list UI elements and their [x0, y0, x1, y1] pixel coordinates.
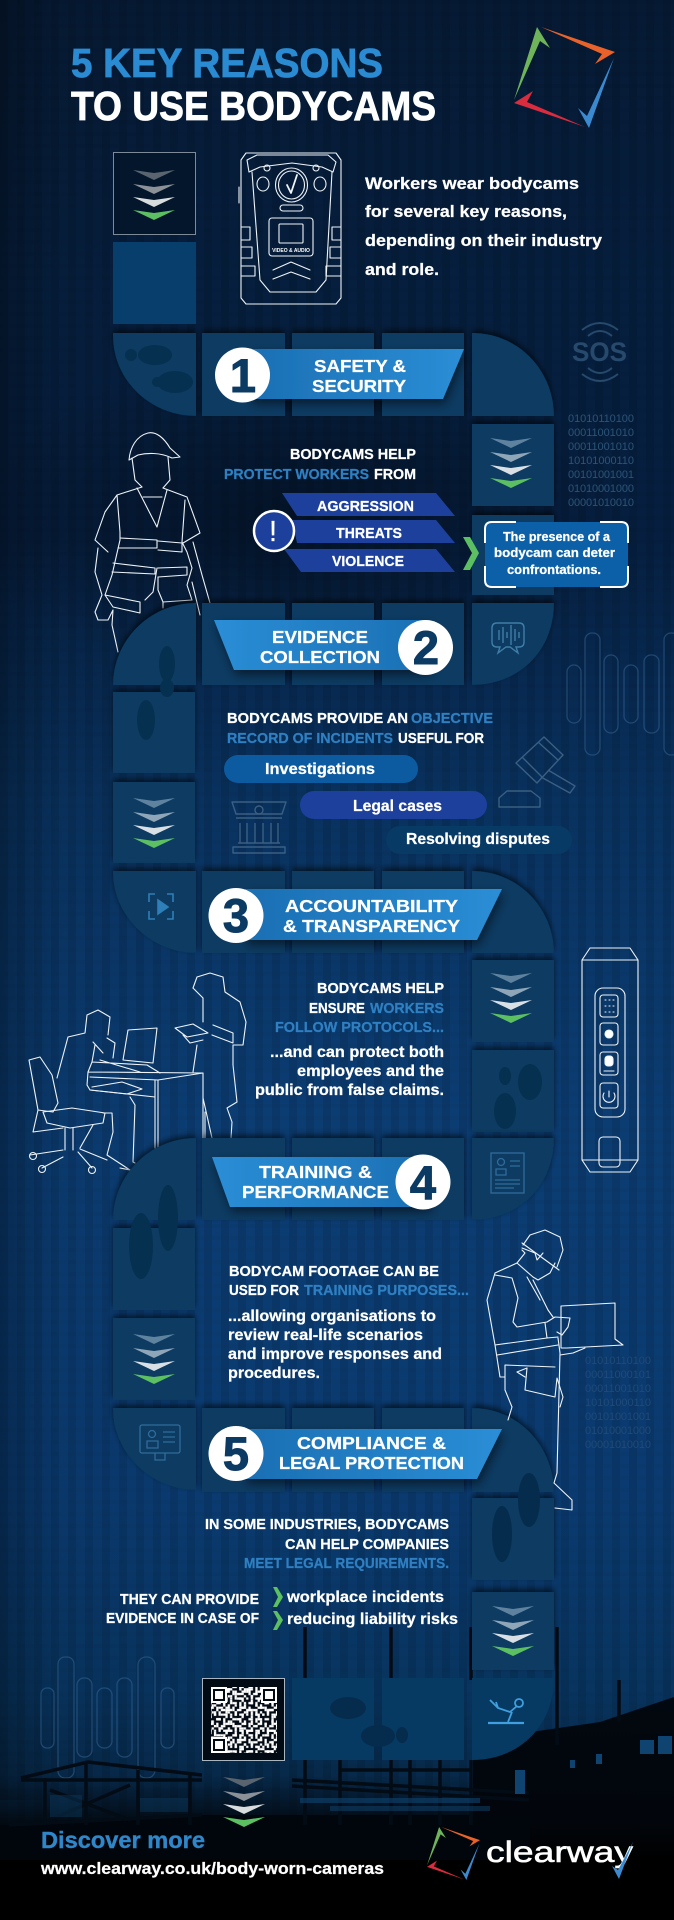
icon: play frame: [149, 894, 173, 919]
icon: bodycam: VIDEO & AUDIO: [272, 248, 310, 254]
body text: [229, 1264, 469, 1299]
binary text lower: 00101001001: [585, 1411, 651, 1423]
body text continued: [255, 1044, 444, 1099]
binary text lower: 10101000110: [585, 1397, 651, 1409]
body text: PROTECT WORKERS: [224, 467, 369, 483]
pill: resolving disputes: Resolving disputes: [406, 831, 550, 848]
body text continued: employees and the: [297, 1063, 444, 1080]
binary text lower: 00011000101: [585, 1369, 651, 1381]
tile row 2: [113, 603, 554, 863]
title: [71, 40, 436, 129]
icon: green chevron: [463, 537, 479, 570]
heading 5: COMPLIANCE &: [297, 1433, 446, 1453]
icon: SOS signal: [572, 323, 627, 381]
body text: BODYCAMS HELP: [317, 981, 444, 997]
illustration: worker in vest: [95, 433, 210, 652]
body text: ENSURE: [309, 1001, 365, 1017]
body text: OBJECTIVE: [411, 711, 493, 727]
body text continued: procedures.: [228, 1365, 320, 1382]
binary text lower: 00001010010: [585, 1439, 651, 1451]
icon: radio device: [582, 948, 638, 1172]
body text: CAN HELP COMPANIES: [285, 1537, 449, 1553]
illustration: worker with tablet: [487, 1230, 623, 1510]
steel structure silhouette: [0, 1627, 674, 1860]
banner 4: [212, 1157, 430, 1207]
callout: confrontations.: [507, 563, 601, 577]
number 1: [215, 348, 270, 402]
bottom tile row: [292, 1678, 554, 1760]
binary text lower: 01010001000: [585, 1425, 651, 1437]
number 5: 5: [223, 1427, 249, 1480]
pill: investigations: [224, 755, 418, 783]
list: aggression threats violence: VIOLENCE: [332, 554, 404, 570]
body text: EVIDENCE IN CASE OF: [106, 1611, 259, 1627]
binary text top: 01010001000: [568, 483, 634, 495]
binary text top: 00011001010: [568, 427, 634, 439]
panel: section 5 compliance and legal protection: [106, 1230, 623, 1760]
heading 1: SECURITY: [312, 376, 406, 396]
intro text: for several key reasons,: [365, 203, 567, 221]
number 2: 2: [413, 621, 439, 674]
logo mark top: [514, 27, 615, 128]
heading 2: COLLECTION: [260, 647, 380, 667]
call to action: [40, 1827, 384, 1878]
tile row 4: [113, 1138, 554, 1400]
callout: The presence of a: [503, 530, 611, 544]
arrows below QR: [223, 1777, 265, 1827]
decorative waveform right: [567, 633, 674, 755]
body text: FROM: [374, 467, 416, 483]
heading 4: TRAINING &: [259, 1162, 372, 1182]
tile: arrows outlined: [114, 152, 196, 234]
body text: USEFUL FOR: [398, 731, 484, 747]
binary text top: 10101000110: [568, 455, 634, 467]
number 4: [396, 1154, 450, 1210]
body text continued: [228, 1308, 442, 1382]
heading 3: ACCOUNTABILITY: [285, 896, 458, 916]
number 5: [208, 1426, 264, 1481]
call to action: Discover more: [41, 1827, 205, 1853]
QR code: [202, 1678, 284, 1760]
icon: footprints: [137, 646, 175, 740]
heading 4: [242, 1162, 389, 1202]
list text: workplace incidents: [286, 1589, 444, 1606]
heading 2: EVIDENCE: [272, 627, 368, 647]
tile row 1: [113, 333, 554, 595]
binary text top: [568, 413, 634, 509]
binary text top: 00101001001: [568, 469, 634, 481]
panel: section 4 training and performance: [113, 1138, 554, 1400]
icon: bodycam: [239, 153, 341, 304]
banner 5: [245, 1429, 502, 1479]
binary text top: 01010110100: [568, 413, 634, 425]
arrows tile: [490, 973, 532, 1023]
icon: document: [491, 1153, 524, 1193]
number 2: [398, 620, 453, 675]
icon: footprints: [330, 1473, 540, 1747]
body text: [227, 711, 493, 747]
intro text: and role.: [365, 261, 439, 279]
tile row 5: [113, 1408, 554, 1670]
callout: [485, 522, 628, 587]
icon: monitor profile: [140, 1425, 180, 1460]
number 4: 4: [410, 1156, 436, 1209]
panel: section 3 accountability and transparency: [29, 871, 638, 1174]
body text: IN SOME INDUSTRIES, BODYCAMS: [205, 1517, 449, 1533]
tile row 3: [113, 871, 554, 1132]
body text: BODYCAM FOOTAGE CAN BE: [229, 1264, 439, 1280]
list text: reducing liability risks: [287, 1611, 458, 1628]
list text: [286, 1589, 458, 1628]
green chevrons: [273, 1587, 283, 1630]
clearway logo: [427, 1827, 633, 1880]
binary text lower: 00011001010: [585, 1383, 651, 1395]
intro text: Workers wear bodycams: [365, 175, 579, 193]
body text: THEY CAN PROVIDE: [120, 1592, 259, 1608]
heading 2: [260, 627, 380, 667]
body text: BODYCAMS HELP: [290, 447, 416, 463]
binary text top: 00001010010: [568, 497, 634, 509]
tile: blank: [113, 242, 196, 324]
intro text: depending on their industry: [365, 232, 603, 250]
icon: SOS signal: SOS: [572, 337, 627, 367]
list: aggression threats violence: [254, 493, 455, 572]
binary text lower: 01010110100: [585, 1355, 651, 1367]
pill: legal cases: Legal cases: [353, 798, 442, 815]
body text: BODYCAMS PROVIDE AN: [227, 711, 408, 727]
decorative waveform bottom left: [41, 1657, 174, 1778]
icon: falling person: [488, 1699, 524, 1723]
icon: voice bubble: [492, 623, 524, 653]
binary text top: 00011001010: [568, 441, 634, 453]
panel: section 2 evidence collection: [113, 603, 575, 863]
list: aggression threats violence: !: [269, 516, 277, 548]
banner 3: [245, 889, 502, 940]
arrows tile: [133, 1334, 175, 1384]
heading 1: [312, 356, 406, 396]
icon: courthouse: [232, 802, 286, 853]
number 1: 1: [230, 349, 256, 402]
body text continued: and improve responses and: [228, 1346, 442, 1363]
binary text lower: [585, 1355, 651, 1451]
icon: gavel: [499, 737, 575, 807]
list: aggression threats violence: AGGRESSION: [317, 499, 414, 515]
heading 5: LEGAL PROTECTION: [279, 1453, 464, 1473]
title: 5 KEY REASONS: [71, 40, 383, 86]
banner 1: [250, 349, 464, 399]
body text: WORKERS: [370, 1001, 444, 1017]
pill: legal cases: [300, 791, 487, 819]
panel: intro: [113, 152, 603, 324]
body text: USED FOR: [229, 1283, 299, 1299]
panel: section 1 safety and security: [95, 333, 628, 652]
body text: FOLLOW PROTOCOLS...: [275, 1020, 444, 1036]
arrows tile: [490, 438, 532, 488]
icon: footprints: [125, 345, 193, 393]
arrows tile: [492, 1606, 534, 1656]
heading 4: PERFORMANCE: [242, 1182, 389, 1202]
list: aggression threats violence: THREATS: [336, 526, 402, 542]
body text continued: public from false claims.: [255, 1082, 444, 1099]
number 3: [208, 888, 264, 943]
number 3: 3: [223, 889, 249, 942]
arrows tile: [133, 798, 175, 848]
heading 1: SAFETY &: [314, 356, 406, 376]
title: TO USE BODYCAMS: [71, 83, 436, 129]
body text continued: ...allowing organisations to: [228, 1308, 436, 1325]
body text: [224, 447, 416, 483]
heading 3: & TRANSPARENCY: [283, 916, 460, 936]
intro text: [365, 175, 603, 279]
icon: footprints: [129, 1185, 178, 1279]
illustration: office workers: [29, 973, 246, 1174]
body text continued: review real-life scenarios: [228, 1327, 423, 1344]
call to action: www.clearway.co.uk/body-worn-cameras: [40, 1859, 384, 1878]
heading 3: [283, 896, 460, 936]
body text: TRAINING PURPOSES...: [304, 1283, 469, 1299]
banner 2: [214, 620, 430, 670]
pill: investigations: Investigations: [265, 761, 375, 778]
body text: [275, 981, 444, 1036]
body text: MEET LEGAL REQUIREMENTS.: [244, 1556, 449, 1572]
body text continued: ...and can protect both: [270, 1044, 444, 1061]
clearway logo: clearway: [486, 1836, 633, 1869]
pill: resolving disputes: [386, 826, 572, 854]
heading 5: [279, 1433, 464, 1473]
body text: [106, 1517, 449, 1627]
icon: footprints: [494, 1064, 542, 1129]
body text: RECORD OF INCIDENTS: [227, 731, 393, 747]
callout: bodycam can deter: [494, 546, 615, 560]
